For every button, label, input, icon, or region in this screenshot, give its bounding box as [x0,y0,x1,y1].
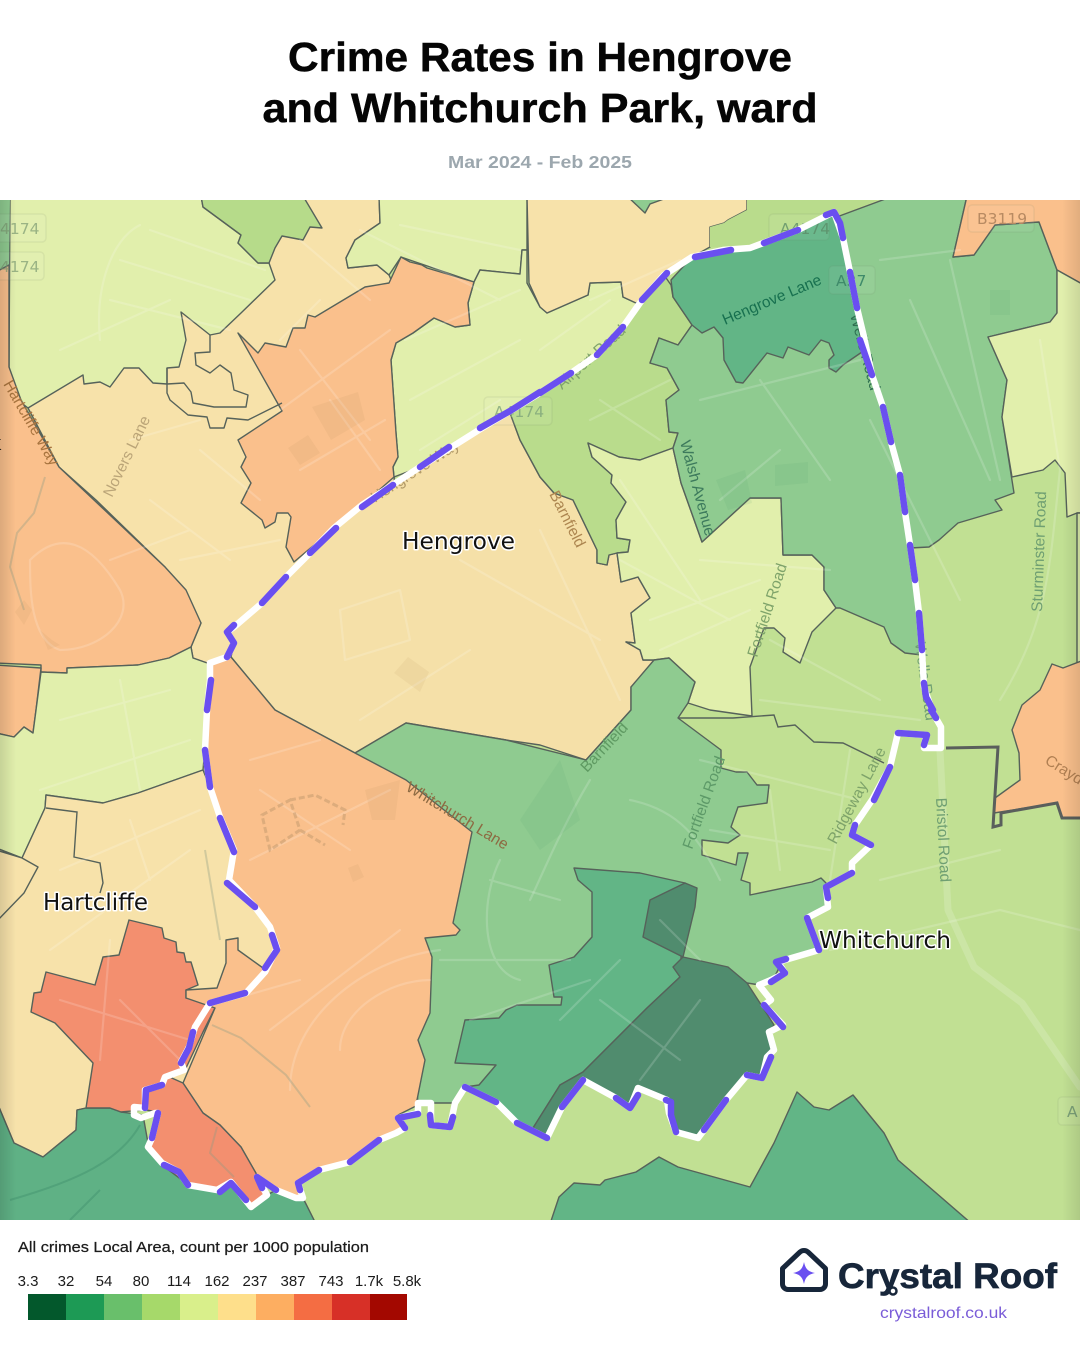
region: mid-green Whitchurch Lane [355,658,828,1103]
road labels: Airport Road [553,322,629,393]
legend title: All crimes Local Area, count per 1000 population [18,1239,369,1256]
region: mid-green east [834,196,1057,548]
road labels: Ridgeway Lane [825,745,890,847]
legend values: 162 [204,1273,230,1290]
boundary: Hartcliffe inner lines [46,808,103,893]
region: Hengrove Lane dark green [671,215,862,383]
region: cream west of Hengrove [28,196,400,664]
road labels: Barnfield [577,719,632,776]
ward boundary: violet dashes [145,212,936,1200]
road shields: A4174 [780,220,830,238]
streams and paths [10,477,310,1177]
region: mid-green centre [650,300,922,655]
region: green strip top-left [0,196,10,272]
road shields: 4174 [0,258,39,276]
region: Hengrove cream [227,413,660,760]
woodland streams [10,1125,140,1220]
legend values: 114 [167,1273,191,1290]
block tints in green areas [520,290,1010,850]
legend values: 32 [58,1273,74,1290]
region: green fragment top [630,200,663,214]
region: darker green Whitchurch Park [455,868,685,1128]
map edge shading [0,200,1080,1220]
housing estate pattern [262,795,345,850]
road labels: Sturminster Road [1029,491,1050,612]
region: orange west [0,265,201,673]
legend values: 743 [318,1273,344,1290]
region: light green north strip [710,200,748,247]
title: Crime Rates in Hengrove [288,34,792,80]
road labels: Wells Road [911,641,939,722]
boundary: small loops north of Novers Lane [167,335,282,428]
road labels: Novers Lane [100,413,154,500]
region: pale south-west [0,647,210,858]
website url: crystalroof.co.uk [880,1305,1008,1322]
legend values: 387 [280,1273,306,1290]
region: orange central [238,257,474,562]
title: and Whitchurch Park, ward [262,85,818,131]
legend values: 3.3 [18,1273,38,1290]
icon: house with star [782,1250,826,1290]
subtitle: date range: Mar 2024 - Feb 2025 [448,152,632,172]
region: cream north of ward [527,196,747,313]
road shields: B3119 [977,210,1027,228]
road labels: Bristol Road [932,797,953,883]
region: deep green woodland south-west [0,1100,316,1224]
region: darkest green [533,883,774,1138]
road labels: Hengrove Way [368,436,463,506]
region: pale north-west [9,196,275,408]
road network [30,225,1080,1090]
region: pale north [346,196,527,282]
road labels: Hengrove Lane [720,272,824,329]
boundary: Ridgeway north line [678,715,884,763]
legend colour scale [28,1294,407,1320]
legend values: 80 [133,1273,149,1290]
road labels [0,272,1080,883]
region: orange south-east Craydon [994,660,1080,818]
region: orange north-east B3119 [953,196,1080,285]
legend values [18,1273,422,1290]
road labels: Whitchurch Lane [403,779,511,853]
ward boundary: white line [134,212,941,1207]
logo: Crystal Roof [782,1250,1057,1296]
road shields: 4174 [0,220,39,238]
region: salmon southern tip [145,1075,267,1207]
region: pale east [988,270,1080,517]
place label: Hartcliffe: Hartcliffe [43,890,148,916]
legend values: 237 [242,1273,268,1290]
region: light-mid green Airport Road [510,275,692,565]
choropleth map [0,196,1080,1224]
logo: Crystal Roof: Crystal Roof [838,1257,1057,1296]
legend values: 1.7k [355,1273,384,1290]
place label: Whitchurch: Whitchurch [819,928,951,954]
region: pale far east strip [1077,513,1080,665]
road labels: Wells Road [846,312,883,392]
region: Hartcliffe cream [0,770,277,1157]
region: orange south-west fragment [0,665,41,737]
region: orange Whitchurch Lane south [183,657,472,1198]
boundary: thick district line [946,747,1080,827]
road shields: A4174 [494,403,544,421]
place label: Hengrove: Hengrove [402,529,515,555]
legend values: 5.8k [393,1273,422,1290]
road shields: A37 [836,272,866,290]
region: pale Walsh Avenue [588,443,836,716]
road labels: Barnfield [545,488,588,550]
road labels: Fortfield Road [680,754,729,851]
road labels: Walsh Avenue [676,439,718,538]
title [262,34,818,131]
legend values: 54 [96,1273,112,1290]
road shields [0,205,1080,1125]
road labels: Hartcliffe Way [0,378,62,469]
region: light green north [201,196,322,263]
region: salmon Hartcliffe hot spot [31,920,215,1112]
parks and buildings tint [15,392,429,882]
road labels: Fortfield Road [745,561,791,659]
road shields: A [1067,1103,1078,1121]
region: pale below Hengrove Way [391,250,642,477]
region: southern green woodland [550,1092,972,1224]
